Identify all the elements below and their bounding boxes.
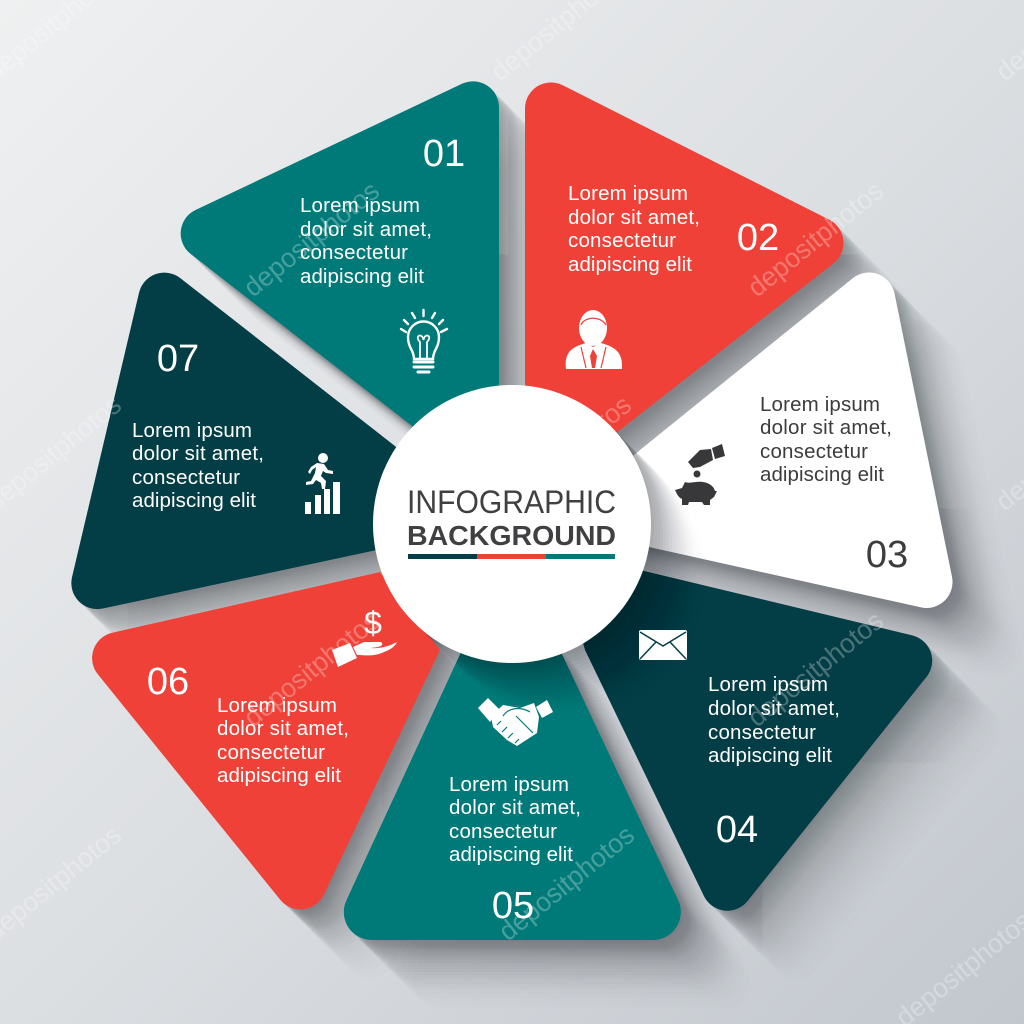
text block 02: consectetur xyxy=(568,229,676,252)
text block 02 xyxy=(568,182,700,276)
text block 01 xyxy=(300,194,432,288)
icon: businessman xyxy=(566,310,622,369)
text block 04: Lorem ipsum xyxy=(708,673,828,696)
text block 07: dolor sit amet, xyxy=(132,442,264,465)
circle long shadow xyxy=(376,388,705,717)
text block 01: consectetur xyxy=(300,241,408,264)
text block 05: Lorem ipsum xyxy=(449,773,569,796)
text block 04: adipiscing elit xyxy=(708,744,832,767)
center title xyxy=(407,484,616,559)
icon: hand and piggy bank xyxy=(675,444,725,505)
center circle xyxy=(373,385,651,663)
segment 05 teal xyxy=(344,650,681,940)
segment 02 red xyxy=(525,82,844,500)
text block 06: adipiscing elit xyxy=(217,764,341,787)
text block 04: dolor sit amet, xyxy=(708,697,840,720)
text block 03: adipiscing elit xyxy=(760,463,884,486)
segment 06 red xyxy=(92,572,440,909)
segment 03 white xyxy=(560,273,953,608)
icon: envelope xyxy=(639,630,687,660)
watermarks: depositphotos xyxy=(238,176,385,303)
number 02: 02 xyxy=(737,217,779,259)
watermarks: depositphotos xyxy=(742,606,889,733)
text block 03 xyxy=(760,393,892,486)
text block 05: adipiscing elit xyxy=(449,843,573,866)
number 01: 01 xyxy=(423,133,465,175)
text block 05: consectetur xyxy=(449,820,557,843)
segment 07 dark xyxy=(71,273,400,609)
icon: runner on bars xyxy=(305,453,340,514)
text block 01: Lorem ipsum xyxy=(300,194,420,217)
text block 07 xyxy=(132,419,264,512)
number 07: 07 xyxy=(157,338,199,380)
text block 05 xyxy=(449,773,581,866)
text block 02: dolor sit amet, xyxy=(568,206,700,229)
watermarks: depositphotos xyxy=(490,390,637,517)
text block 03: dolor sit amet, xyxy=(760,416,892,439)
text block 04: consectetur xyxy=(708,721,816,744)
text block 03: consectetur xyxy=(760,440,868,463)
segment 04 dark xyxy=(560,560,932,911)
number 03: 03 xyxy=(866,534,908,576)
text block 02: adipiscing elit xyxy=(568,253,692,276)
text block 06 xyxy=(217,694,349,787)
text block 07: consectetur xyxy=(132,466,240,489)
text block 05: dolor sit amet, xyxy=(449,796,581,819)
center title: BACKGROUND xyxy=(407,520,616,551)
icon: light bulb xyxy=(401,310,447,372)
text block 07: adipiscing elit xyxy=(132,489,256,512)
number 06: 06 xyxy=(147,661,189,703)
icon: handshake xyxy=(478,698,553,746)
number 04: 04 xyxy=(716,809,758,851)
watermarks: depositphotos xyxy=(493,820,640,947)
center title: INFOGRAPHIC xyxy=(407,484,616,520)
text block 06: Lorem ipsum xyxy=(217,694,337,717)
text block 01: adipiscing elit xyxy=(300,265,424,288)
text block 06: consectetur xyxy=(217,741,325,764)
watermarks: depositphotos xyxy=(742,176,889,303)
icon: hand with dollar: $ xyxy=(364,605,382,641)
text block 01: dolor sit amet, xyxy=(300,218,432,241)
watermarks: depositphotos xyxy=(238,606,385,733)
text block 04 xyxy=(708,673,840,767)
icon: hand with dollar xyxy=(332,605,397,667)
text block 02: Lorem ipsum xyxy=(568,182,688,205)
text block 03: Lorem ipsum xyxy=(760,393,880,416)
text block 06: dolor sit amet, xyxy=(217,717,349,740)
number 05: 05 xyxy=(492,885,534,927)
segment 01 teal xyxy=(181,81,499,500)
text block 07: Lorem ipsum xyxy=(132,419,252,442)
